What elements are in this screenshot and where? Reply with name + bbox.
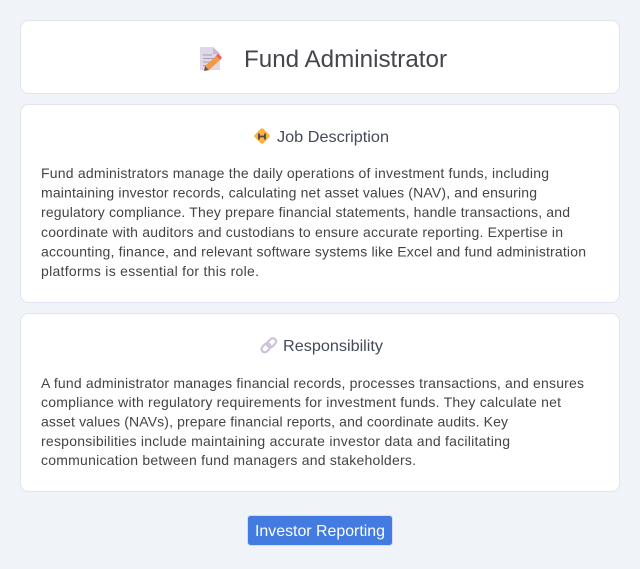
button: investor reporting — [248, 516, 392, 546]
text block: job description: platforms is essential for this role. — [41, 263, 259, 279]
panel: job description — [20, 104, 620, 302]
text block: job description: maintaining investor records, calculating net asset values (NAV), and ensuring — [41, 184, 537, 200]
text block: job description: accounting, finance, and relevant software systems like Excel and fund administration — [41, 244, 586, 260]
text block: responsibility — [41, 375, 584, 468]
icon: chain link — [260, 337, 277, 354]
text block: responsibility: responsibilities include maintaining accurate investor data and facilitating — [41, 433, 510, 449]
panel: title card — [20, 20, 620, 94]
text block: job description: Fund administrators manage the daily operations of investment funds, including — [41, 165, 549, 181]
heading: job description: Job Description — [277, 129, 389, 146]
text block: job description — [41, 165, 586, 279]
text block: job description: coordinate with auditors and custodians to ensure accurate reporting. Expertise in — [41, 224, 563, 240]
text block: responsibility: communication between fund managers and stakeholders. — [41, 452, 416, 468]
title: Fund Administrator — [244, 46, 447, 73]
text block: responsibility: asset values (NAVs), prepare financial reports, and coordinate audits. Key — [41, 414, 508, 430]
button: investor reporting: Investor Reporting — [255, 523, 385, 540]
text block: responsibility: A fund administrator manages financial records, processes transactions, and ensures — [41, 375, 584, 391]
text block: job description: regulatory compliance. They prepare financial statements, handle transactions, and — [41, 204, 570, 220]
panel: responsibility — [20, 314, 620, 492]
icon: orange diamond — [254, 128, 270, 144]
text block: responsibility: compliance with regulatory requirements for investment funds. They calculate net — [41, 394, 561, 410]
heading: responsibility: Responsibility — [283, 338, 383, 355]
icon: document with pencil — [200, 47, 222, 71]
